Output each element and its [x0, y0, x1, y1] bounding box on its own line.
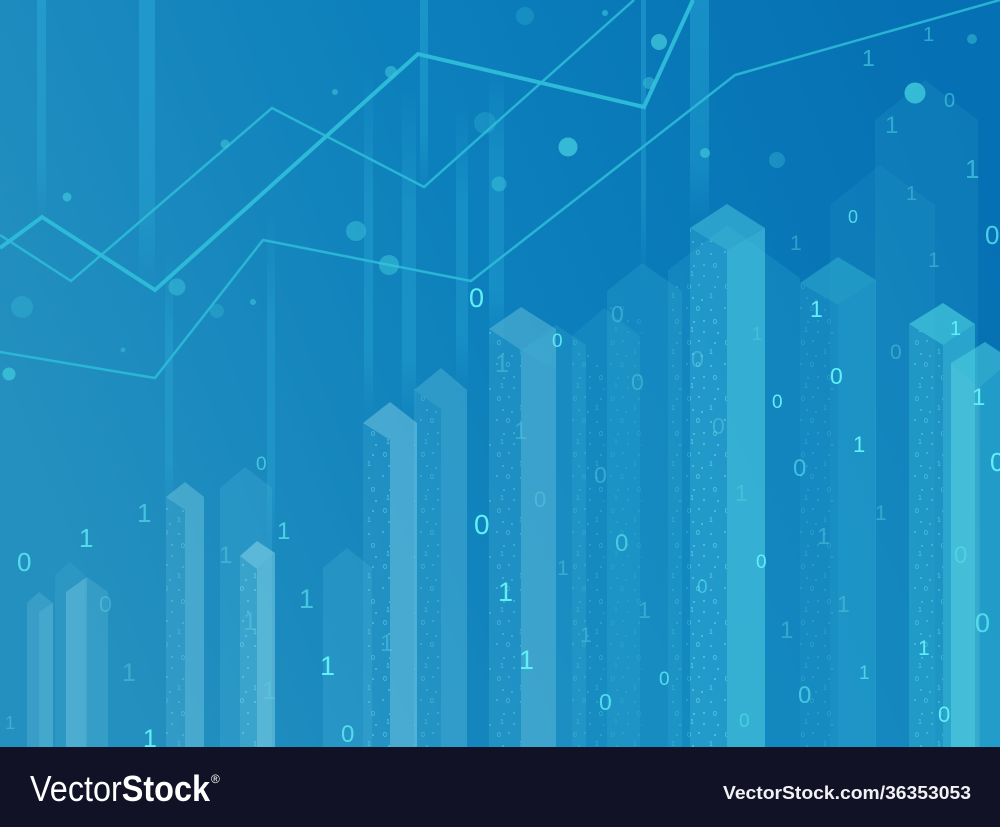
binary digits: faint: 1 — [495, 350, 509, 378]
column dim A — [607, 263, 682, 747]
binary digits: faint: 1 — [837, 591, 850, 617]
binary digits: bright: 1 — [519, 645, 534, 675]
column mid 1 — [489, 307, 556, 747]
binary digits: bright: 1 — [918, 637, 930, 660]
binary digits: faint: 1 — [5, 713, 15, 733]
footer logo: registered mark: ® — [211, 772, 220, 786]
column 240 — [240, 541, 275, 747]
column 220 — [220, 467, 272, 747]
binary digits: faint: 1 — [219, 542, 232, 569]
binary digits: bright: 1 — [277, 518, 290, 545]
binary digits: bright: 0 — [469, 283, 484, 313]
binary digits: faint: 0 — [712, 413, 725, 439]
floating dots — [2, 7, 977, 380]
bright column centre — [690, 204, 765, 747]
binary digits: faint: 1 — [906, 183, 917, 205]
binary digits: bright: 0 — [341, 721, 354, 748]
far column 2 — [830, 165, 935, 747]
binary digits: bright: 0 — [697, 577, 708, 598]
binary digits: faint: 0 — [691, 346, 704, 372]
small column 1 — [27, 592, 53, 747]
column right 2 — [909, 303, 975, 747]
line chart: three trend lines — [0, 0, 1000, 378]
binary digits: bright: 0 — [985, 220, 999, 250]
binary digits: faint: 1 — [735, 480, 748, 506]
binary digits: faint: 0 — [99, 591, 112, 617]
binary digits: faint: 1 — [817, 523, 830, 549]
binary digits: bright: 1 — [862, 45, 875, 71]
binary digits: bright: 0 — [659, 669, 670, 690]
binary digits: faint: 1 — [580, 624, 592, 647]
binary digits: faint: 1 — [780, 617, 793, 644]
column dim B — [572, 308, 640, 747]
binary digits: faint: 1 — [638, 597, 651, 623]
binary digits: bright: 1 — [320, 651, 335, 681]
binary digits: bright: 1 — [137, 498, 151, 528]
column right mid — [800, 257, 876, 747]
binary digits: faint — [5, 183, 940, 733]
binary digits: bright: 0 — [256, 454, 267, 475]
thin trend line — [0, 0, 1000, 378]
binary digits: bright: 0 — [798, 682, 811, 709]
binary digits: bright: 1 — [79, 523, 93, 553]
binary digits: bright: 1 — [885, 112, 898, 139]
binary digits: bright: 0 — [599, 689, 612, 715]
column right 3 — [951, 342, 1000, 747]
column dim C — [668, 225, 800, 747]
binary digits: bright: 0 — [474, 509, 490, 540]
binary digits: faint: 0 — [594, 462, 607, 488]
binary digits: faint: 1 — [262, 677, 276, 705]
binary digits: bright: 0 — [756, 552, 767, 573]
binary digits: faint: 1 — [928, 249, 940, 272]
binary digits: faint: 1 — [875, 502, 887, 525]
column 323 — [323, 548, 372, 747]
binary digits: bright: 0 — [552, 331, 563, 352]
binary digits: bright: 1 — [853, 432, 865, 457]
column 363 — [363, 402, 417, 747]
binary digits: faint: 0 — [631, 369, 644, 395]
binary digits: faint: 1 — [122, 659, 136, 687]
thick trend line — [0, 0, 693, 290]
bar chart: isometric columns — [27, 80, 1000, 747]
binary digits: bright: 0 — [848, 207, 858, 227]
footer logo: VectorStock: VectorStock — [30, 768, 211, 809]
binary digits: bright: 1 — [923, 24, 934, 46]
binary digits: faint: 0 — [890, 341, 902, 364]
binary digits: bright: 1 — [859, 663, 870, 684]
binary digits: faint: 1 — [380, 630, 393, 657]
binary digits: faint: 1 — [752, 324, 762, 344]
binary digits: bright: 1 — [950, 318, 961, 340]
binary digits: faint: 1 — [514, 418, 527, 445]
small column 3 — [66, 577, 108, 747]
binary digits: bright: 0 — [615, 530, 628, 557]
binary digits: bright: 1 — [143, 725, 157, 753]
binary digits: bright: 0 — [944, 90, 955, 112]
binary digits: bright: 0 — [772, 392, 783, 413]
binary digits: bright: 1 — [972, 384, 985, 411]
binary digits: faint: 1 — [557, 557, 569, 580]
binary digits: bright: 1 — [965, 154, 979, 184]
small column 2 — [55, 562, 85, 747]
binary digits: faint: 1 — [243, 608, 257, 636]
binary digits: bright: 0 — [975, 608, 990, 638]
binary digits: bright: 1 — [498, 577, 513, 607]
binary digits: bright: 0 — [793, 455, 806, 482]
binary digits: bright: 0 — [739, 711, 750, 732]
binary digits: faint: 0 — [534, 487, 546, 512]
column 414 — [414, 368, 467, 747]
binary digits: bright: 0 — [17, 547, 31, 577]
footer bar — [0, 747, 1000, 827]
column mid 2 — [521, 325, 586, 747]
binary digits: bright: 0 — [954, 542, 967, 569]
far column 1 — [875, 80, 978, 747]
medium trend line — [0, 0, 634, 281]
binary digits: bright: 0 — [830, 363, 843, 389]
footer url: VectorStock.com/36353053 — [723, 783, 971, 803]
binary digits: bright: 0 — [938, 702, 950, 727]
vertical light beams — [37, 0, 709, 550]
column 166 — [166, 482, 204, 747]
binary digits: bright: 1 — [299, 584, 314, 614]
binary digits: bright: 1 — [810, 296, 823, 322]
binary digits: faint: 1 — [790, 232, 802, 255]
binary digits: faint: 0 — [611, 301, 624, 327]
